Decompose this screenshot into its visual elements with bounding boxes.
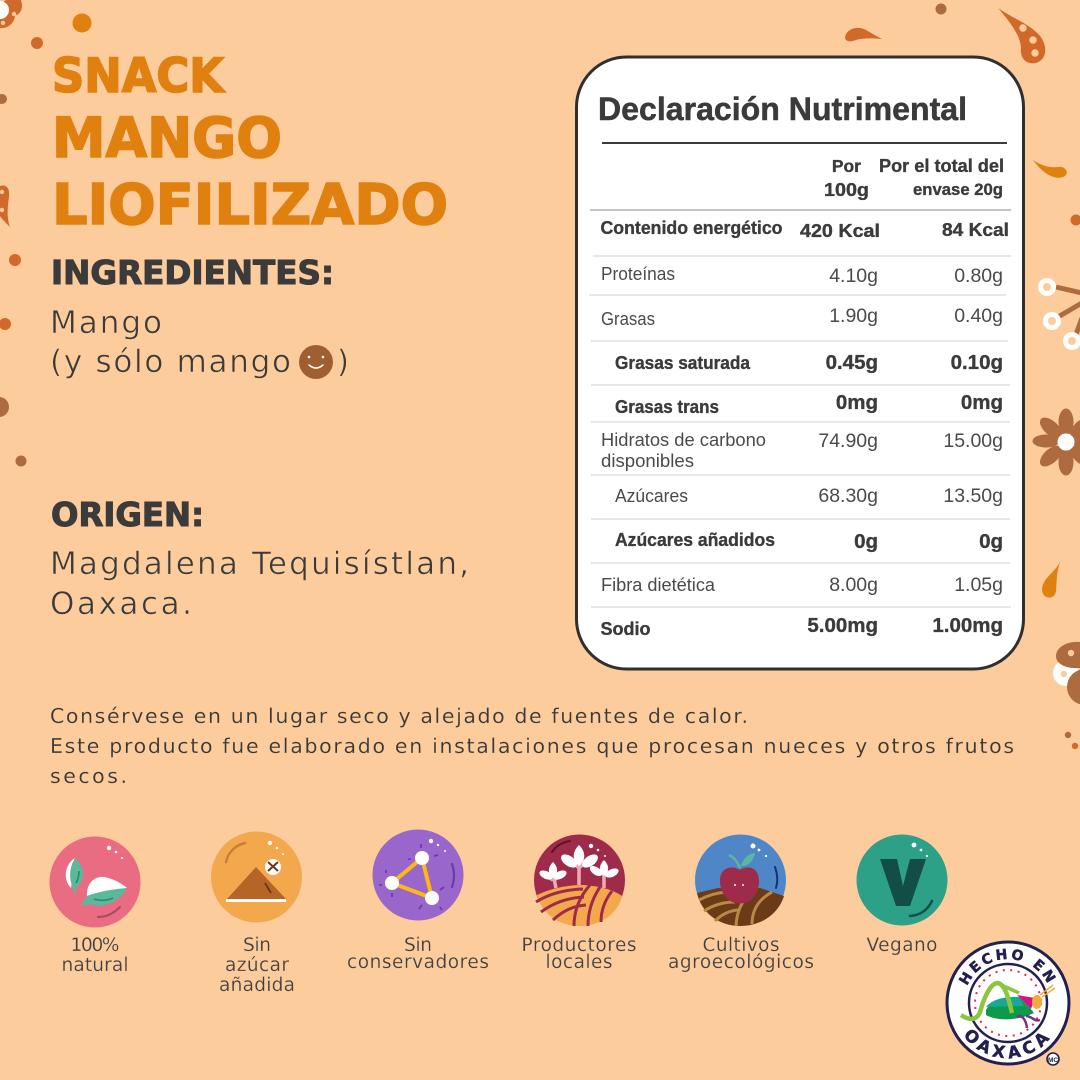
table rows: 0mg bbox=[961, 391, 1003, 414]
icon label: productores locales: Productores bbox=[522, 935, 636, 956]
icon label: cultivos agroecológicos bbox=[668, 935, 814, 973]
logo: Hecho en Oaxaca stamp: MC bbox=[1048, 1057, 1058, 1064]
table column headers: Por bbox=[832, 156, 861, 176]
table rows: 1.05g bbox=[954, 574, 1003, 596]
icon: sin azúcar añadida bbox=[211, 832, 302, 922]
ingredients section: ) bbox=[337, 344, 349, 380]
table rows: 0.10g bbox=[951, 351, 1003, 374]
icon: vegano bbox=[856, 834, 948, 926]
table rows: 84 Kcal bbox=[942, 220, 1009, 240]
table column headers: envase 20g bbox=[913, 181, 1003, 199]
title: SNACK bbox=[52, 49, 225, 104]
icon label: cultivos agroecológicos: agroecológicos bbox=[668, 952, 814, 973]
table rows: 0mg bbox=[836, 391, 878, 414]
storage note: Consérvese en un lugar seco y alejado de fuentes de calor. bbox=[50, 704, 748, 728]
table rows: 0g bbox=[979, 530, 1003, 553]
table rows: Grasas saturada bbox=[615, 353, 751, 373]
table rows: Azúcares bbox=[615, 486, 688, 506]
table rows: Hidratos de carbono bbox=[601, 430, 766, 450]
table rows: 0g bbox=[854, 530, 878, 553]
ingredients section bbox=[50, 253, 349, 380]
table rows: Grasas trans bbox=[615, 397, 719, 417]
table rows: 74.90g bbox=[818, 430, 878, 452]
grasshopper bbox=[961, 983, 1055, 1028]
logo: Hecho en Oaxaca stamp: HECHO EN bbox=[958, 948, 1056, 986]
icon label: 100% natural bbox=[62, 935, 128, 976]
table rows: 1.00mg bbox=[932, 614, 1003, 637]
icon: cultivos agroecológicos bbox=[695, 834, 786, 926]
title: MANGO bbox=[52, 106, 282, 170]
table rows: 8.00g bbox=[829, 574, 878, 596]
table rows: 68.30g bbox=[818, 485, 878, 507]
table rows: Grasas bbox=[601, 309, 655, 329]
storage note: Este producto fue elaborado en instalaciones que procesan nueces y otros frutos bbox=[50, 734, 1014, 758]
icon label: cultivos agroecológicos: Cultivos bbox=[702, 935, 780, 956]
table rows: disponibles bbox=[601, 451, 694, 471]
icon label: sin azúcar añadida bbox=[219, 935, 295, 996]
table rows: 15.00g bbox=[943, 430, 1003, 452]
icon label: 100% natural: natural bbox=[62, 955, 128, 976]
icon label: sin conservadores: conservadores bbox=[347, 952, 489, 973]
table rows: Sodio bbox=[600, 619, 650, 639]
icon: sin conservadores bbox=[372, 830, 464, 920]
panel: nutrition table bbox=[576, 57, 1024, 669]
ingredients section: (y sólo mango bbox=[50, 344, 291, 380]
title bbox=[52, 49, 448, 238]
icon: productores locales bbox=[534, 834, 625, 926]
table rows: 0.80g bbox=[954, 265, 1003, 287]
icon label: productores locales: locales bbox=[546, 952, 612, 973]
table rows: 5.00mg bbox=[807, 614, 878, 637]
icon label: vegano: Vegano bbox=[866, 935, 938, 956]
icon label: sin conservadores: Sin bbox=[404, 935, 432, 956]
icon label: sin azúcar añadida: Sin bbox=[243, 935, 271, 956]
table rows: 420 Kcal bbox=[800, 221, 880, 241]
table rows: Contenido energético bbox=[600, 218, 782, 238]
ingredients section: INGREDIENTES: bbox=[51, 253, 334, 292]
icon label: sin azúcar añadida: azúcar bbox=[225, 955, 289, 976]
icon label: productores locales bbox=[522, 935, 636, 973]
origin section: Magdalena Tequisístlan, bbox=[50, 546, 469, 582]
decorative motifs: top and right edge bbox=[845, 4, 1080, 749]
table column headers bbox=[824, 156, 1004, 200]
logo: Hecho en Oaxaca stamp bbox=[946, 940, 1070, 1066]
origin section: Oaxaca. bbox=[50, 586, 192, 622]
icon: 100% natural bbox=[50, 836, 140, 928]
storage note bbox=[50, 704, 1014, 788]
table rows: Proteínas bbox=[601, 264, 675, 284]
table rows: 13.50g bbox=[943, 485, 1003, 507]
decorative motifs: left edge bbox=[0, 0, 92, 466]
table column headers: Por el total del bbox=[879, 156, 1004, 176]
origin section bbox=[50, 495, 469, 622]
logo: Hecho en Oaxaca stamp: OAXACA bbox=[965, 1030, 1050, 1059]
icon label: 100% natural: 100% bbox=[70, 935, 120, 956]
storage note: secos. bbox=[50, 764, 127, 788]
table rows: 4.10g bbox=[829, 265, 878, 287]
icon label: sin azúcar añadida: añadida bbox=[219, 975, 295, 996]
table rows bbox=[600, 218, 1009, 639]
table heading: Declaración Nutrimental bbox=[598, 91, 967, 127]
table rows: 0.45g bbox=[826, 351, 878, 374]
table rows: 0.40g bbox=[954, 305, 1003, 327]
ingredients section: Mango bbox=[50, 305, 162, 341]
table rows: Fibra dietética bbox=[601, 575, 716, 595]
title: LIOFILIZADO bbox=[52, 173, 448, 238]
table column headers: 100g bbox=[824, 180, 869, 200]
icon label: sin conservadores bbox=[347, 935, 489, 973]
table rows: 1.90g bbox=[829, 305, 878, 327]
origin section: ORIGEN: bbox=[51, 495, 204, 534]
table rows: Azúcares añadidos bbox=[615, 530, 775, 550]
